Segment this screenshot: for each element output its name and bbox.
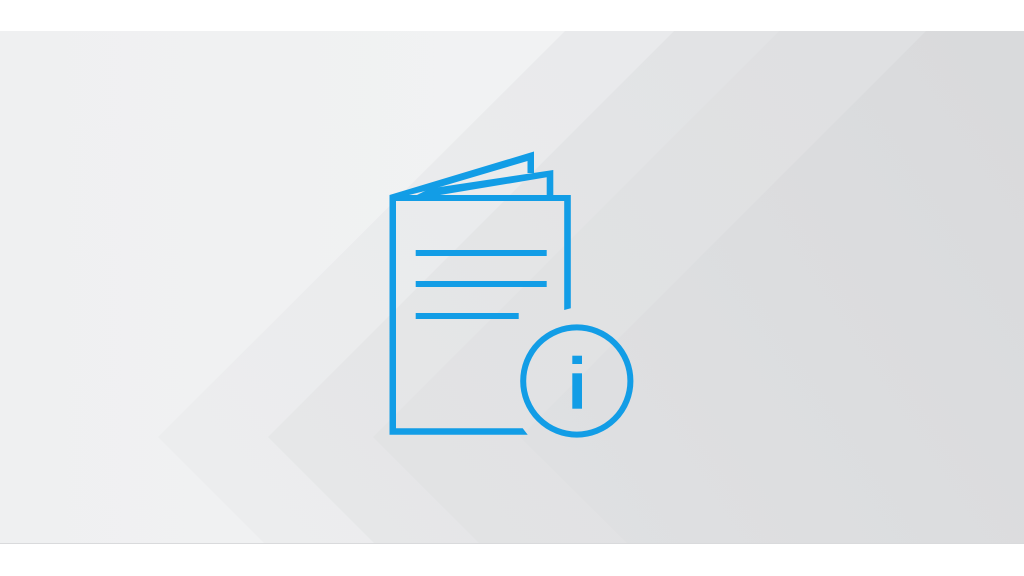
icon: front cover outline bbox=[390, 195, 571, 435]
text lines on the cover bbox=[416, 250, 547, 319]
icon: back pages of brochure bbox=[390, 152, 553, 198]
icon: info circle bbox=[523, 327, 630, 435]
icon: brochure with info badge bbox=[390, 152, 630, 435]
